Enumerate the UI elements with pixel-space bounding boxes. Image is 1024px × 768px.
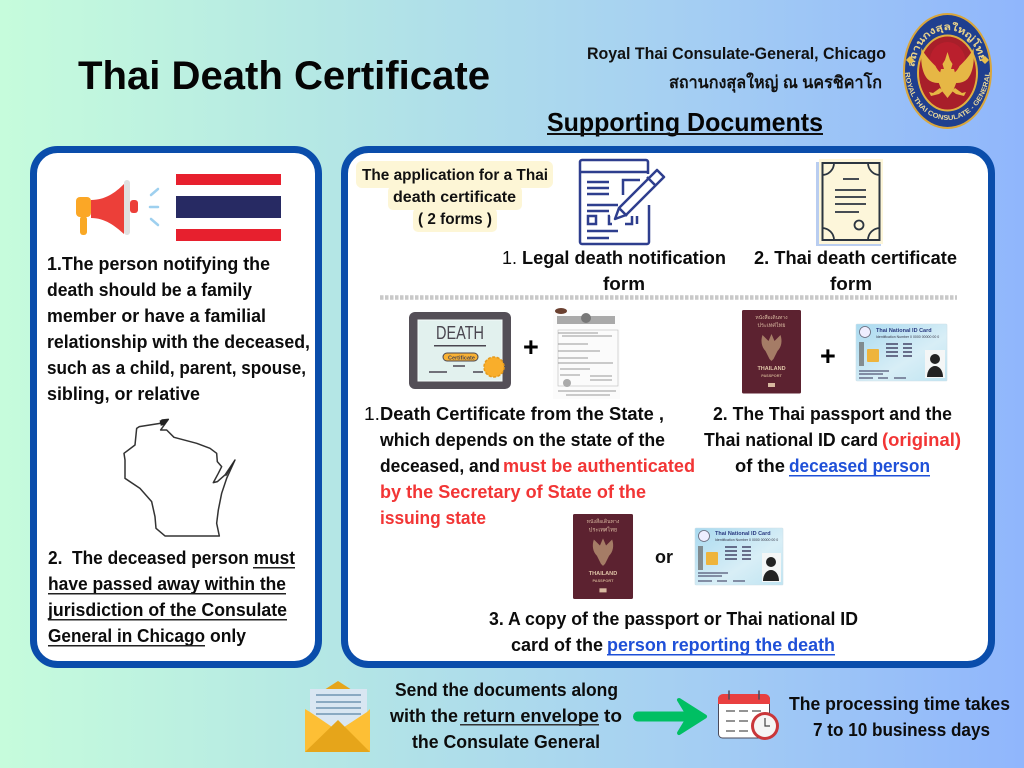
image: id card copy: Identification Number 0 0000 00000 00 0: [715, 538, 778, 542]
icon: certificate form: [816, 159, 883, 246]
text: notifier requirement: [47, 254, 310, 404]
image: thai national id card: Thai National ID Card: [876, 328, 932, 334]
icon: form with pen: [580, 160, 664, 244]
panel: supporting documents: [344, 150, 992, 664]
text: send the documents: Send the documents along: [395, 680, 618, 700]
text: notifier requirement: death should be a family: [47, 280, 252, 300]
text: notifier requirement: sibling, or relative: [47, 384, 200, 404]
text: reporter document requirement: person reporting the death: [607, 635, 835, 655]
text: notifier requirement: such as a child, parent, spouse,: [47, 358, 306, 378]
image: thai passport: ประเทศไทย: [757, 322, 786, 329]
text: passport and id card requirement: deceased person: [789, 456, 930, 476]
icon: death certificate: [409, 312, 511, 389]
text: notifier requirement: relationship with the deceased,: [47, 332, 310, 352]
icon: wisconsin outline: [124, 419, 235, 536]
text: send the documents: to: [604, 706, 622, 726]
text: jurisdiction requirement: General in Chicago: [48, 626, 205, 646]
icon: envelope: [305, 681, 370, 752]
text: passport and id card requirement: [704, 404, 961, 476]
text: passport and id card requirement: (original): [882, 430, 961, 450]
panel: notifier and jurisdiction: [34, 150, 318, 664]
text: send the documents: with the: [389, 706, 458, 726]
consulate seal: [903, 13, 992, 129]
text: state death certificate requirement: issuing state: [380, 508, 486, 528]
consulate seal: สถานกงสุลใหญ่โทย: [909, 22, 984, 66]
image: passport copy: PASSPORT: [593, 579, 614, 583]
callout: application forms: [356, 161, 553, 232]
text: passport and id card requirement: 2. The Thai passport and the: [713, 404, 952, 424]
text: legal death notification form: Legal death notification: [522, 248, 726, 268]
text: jurisdiction requirement: only: [210, 626, 246, 646]
image: passport copy: ประเทศไทย: [589, 526, 617, 533]
image: thai passport: [742, 310, 801, 394]
image: passport copy: [573, 514, 633, 599]
plus sign: +: [820, 341, 836, 371]
text: thai death certificate form: [754, 248, 957, 294]
image: thai passport: THAILAND: [757, 366, 786, 372]
text: jurisdiction requirement: [47, 548, 295, 646]
text: passport and id card requirement: Thai national ID card: [704, 430, 878, 450]
text: state death certificate requirement: must be authenticated: [503, 456, 695, 476]
image: thai national id card: Identification Number 0 0000 00000 00 0: [876, 335, 939, 339]
text: reporter document requirement: [489, 609, 858, 656]
icon: death certificate: Certificate: [448, 356, 475, 362]
icon: garuda: [921, 48, 974, 98]
text: state death certificate requirement: which depends on the state of the: [379, 430, 665, 450]
text: processing time: 7 to 10 business days: [813, 720, 990, 740]
image: thai national id card: [856, 324, 947, 381]
image: state death certificate document: [553, 308, 620, 399]
text: or: or: [655, 547, 673, 567]
image: id card copy: Thai National ID Card: [715, 531, 771, 537]
text: state death certificate requirement: Death Certificate from the State ,: [380, 404, 664, 424]
text: passport and id card requirement: of the: [735, 456, 785, 476]
consulate name: [587, 44, 886, 93]
text: send the documents: [389, 680, 622, 752]
text: state death certificate requirement: by the Secretary of State of the: [380, 482, 646, 502]
text: send the documents: the Consulate General: [412, 732, 600, 752]
text: state death certificate requirement: [364, 404, 695, 528]
text: reporter document requirement: 3. A copy of the passport or Thai national ID: [489, 609, 858, 629]
text: reporter document requirement: card of the: [511, 635, 603, 655]
title: Thai Death Certificate: [78, 54, 490, 98]
text: send the documents: return envelope: [463, 706, 599, 726]
image: passport copy: THAILAND: [589, 571, 617, 577]
text: notifier requirement: 1.The person notifying the: [47, 254, 270, 274]
consulate seal: ROYAL THAI CONSULATE - GENERAL: [905, 72, 990, 120]
consulate name: สถานกงสุลใหญ่ ณ นครชิคาโก: [669, 72, 882, 93]
text: processing time: The processing time takes: [789, 694, 1010, 714]
heading: supporting documents: Supporting Documents: [547, 107, 823, 137]
text: state death certificate requirement: 1.: [364, 404, 380, 424]
callout: application forms: The application for a Thai: [362, 167, 548, 184]
image: thai passport: PASSPORT: [761, 374, 782, 378]
callout: application forms: death certificate: [393, 189, 516, 206]
image: thai passport: หนังสือเดินทาง: [755, 314, 788, 321]
text: thai death certificate form: 2. Thai death certificate: [754, 248, 957, 268]
text: jurisdiction requirement: 2. The deceased person must: [48, 548, 295, 568]
icon: calendar and clock: [718, 691, 779, 740]
callout: application forms: ( 2 forms ): [418, 211, 492, 228]
text: state death certificate requirement: deceased, and: [380, 456, 500, 476]
text: jurisdiction requirement: jurisdiction of the Consulate: [47, 600, 287, 620]
arrow: [638, 700, 705, 733]
text: jurisdiction requirement: have passed away within the: [48, 574, 286, 594]
text: thai death certificate form: form: [830, 274, 872, 294]
text: legal death notification form: form: [603, 274, 645, 294]
text: legal death notification form: [502, 248, 726, 294]
consulate name: Royal Thai Consulate-General, Chicago: [587, 44, 886, 63]
text: legal death notification form: 1.: [502, 248, 517, 268]
icon: thai flag: [176, 174, 281, 241]
image: passport copy: หนังสือเดินทาง: [587, 518, 620, 525]
text: notifier requirement: member or have a familial: [47, 306, 266, 326]
icon: megaphone: [76, 180, 158, 235]
icon: death certificate: DEATH: [436, 323, 484, 343]
image: id card copy: [695, 528, 783, 585]
text: processing time: [789, 694, 1010, 740]
plus sign: +: [523, 332, 539, 362]
